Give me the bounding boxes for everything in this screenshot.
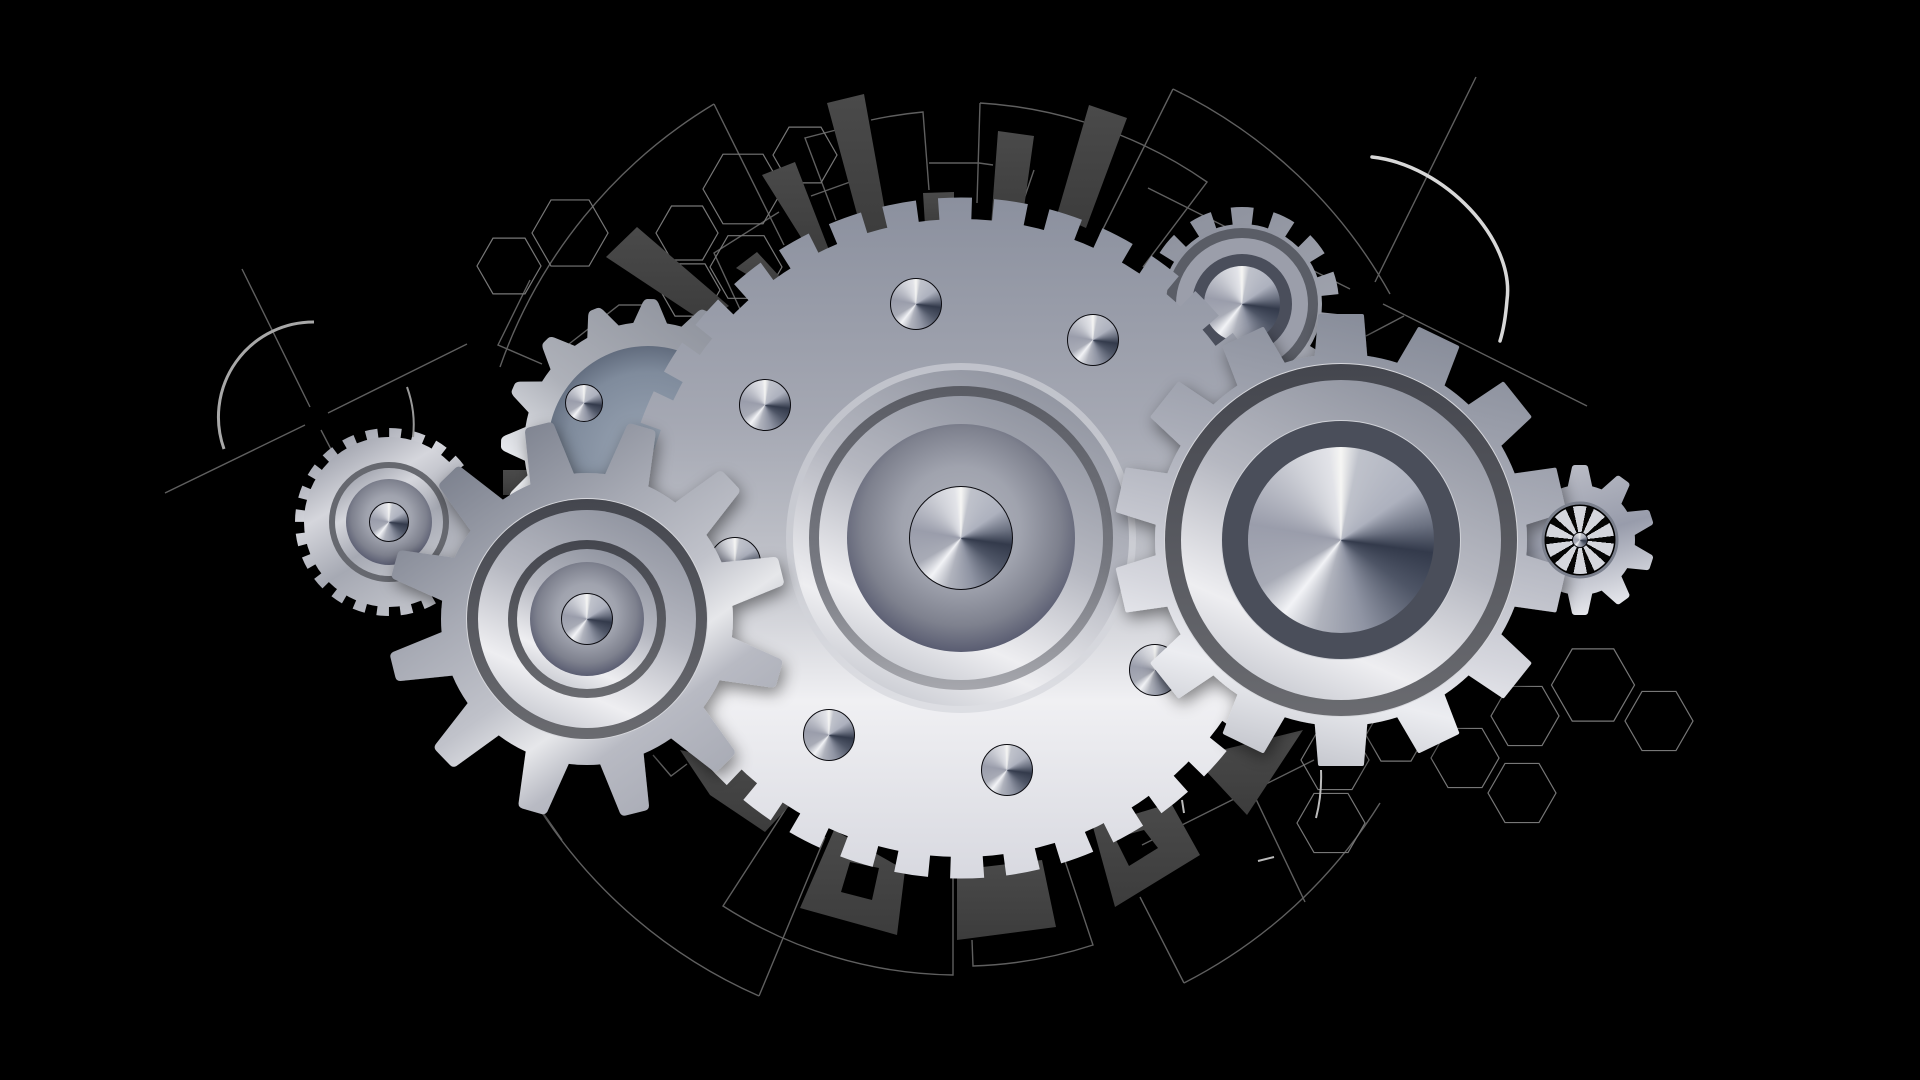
stray arc marks lower right: [1182, 770, 1321, 861]
gear: front left: [380, 410, 800, 830]
gear: upper right (behind main gear): [1154, 216, 1330, 392]
gear: upper left (behind main gear): [500, 299, 712, 496]
main gear hub cap: [909, 486, 1013, 590]
gear: large right: [1110, 310, 1570, 770]
dark radial bars: [503, 94, 1303, 940]
front left gear face: [466, 498, 708, 740]
gear: large main gear: [632, 209, 1290, 867]
gear: small left: [300, 433, 478, 611]
upper-left gear rivet: [565, 384, 603, 422]
hexagon outlines: [477, 127, 1693, 853]
gear illustration: [164, 76, 1694, 996]
bright arc: left: [218, 322, 314, 449]
bright arc: upper right: [1372, 157, 1508, 341]
gear: far right small: [1526, 465, 1653, 615]
wireframe blueprint lines: [165, 77, 1587, 996]
right gear face: [1164, 363, 1518, 717]
main gear rivets: [709, 278, 1181, 796]
far right gear spoked hub: [1543, 503, 1617, 577]
thin arc: left: [407, 387, 414, 437]
